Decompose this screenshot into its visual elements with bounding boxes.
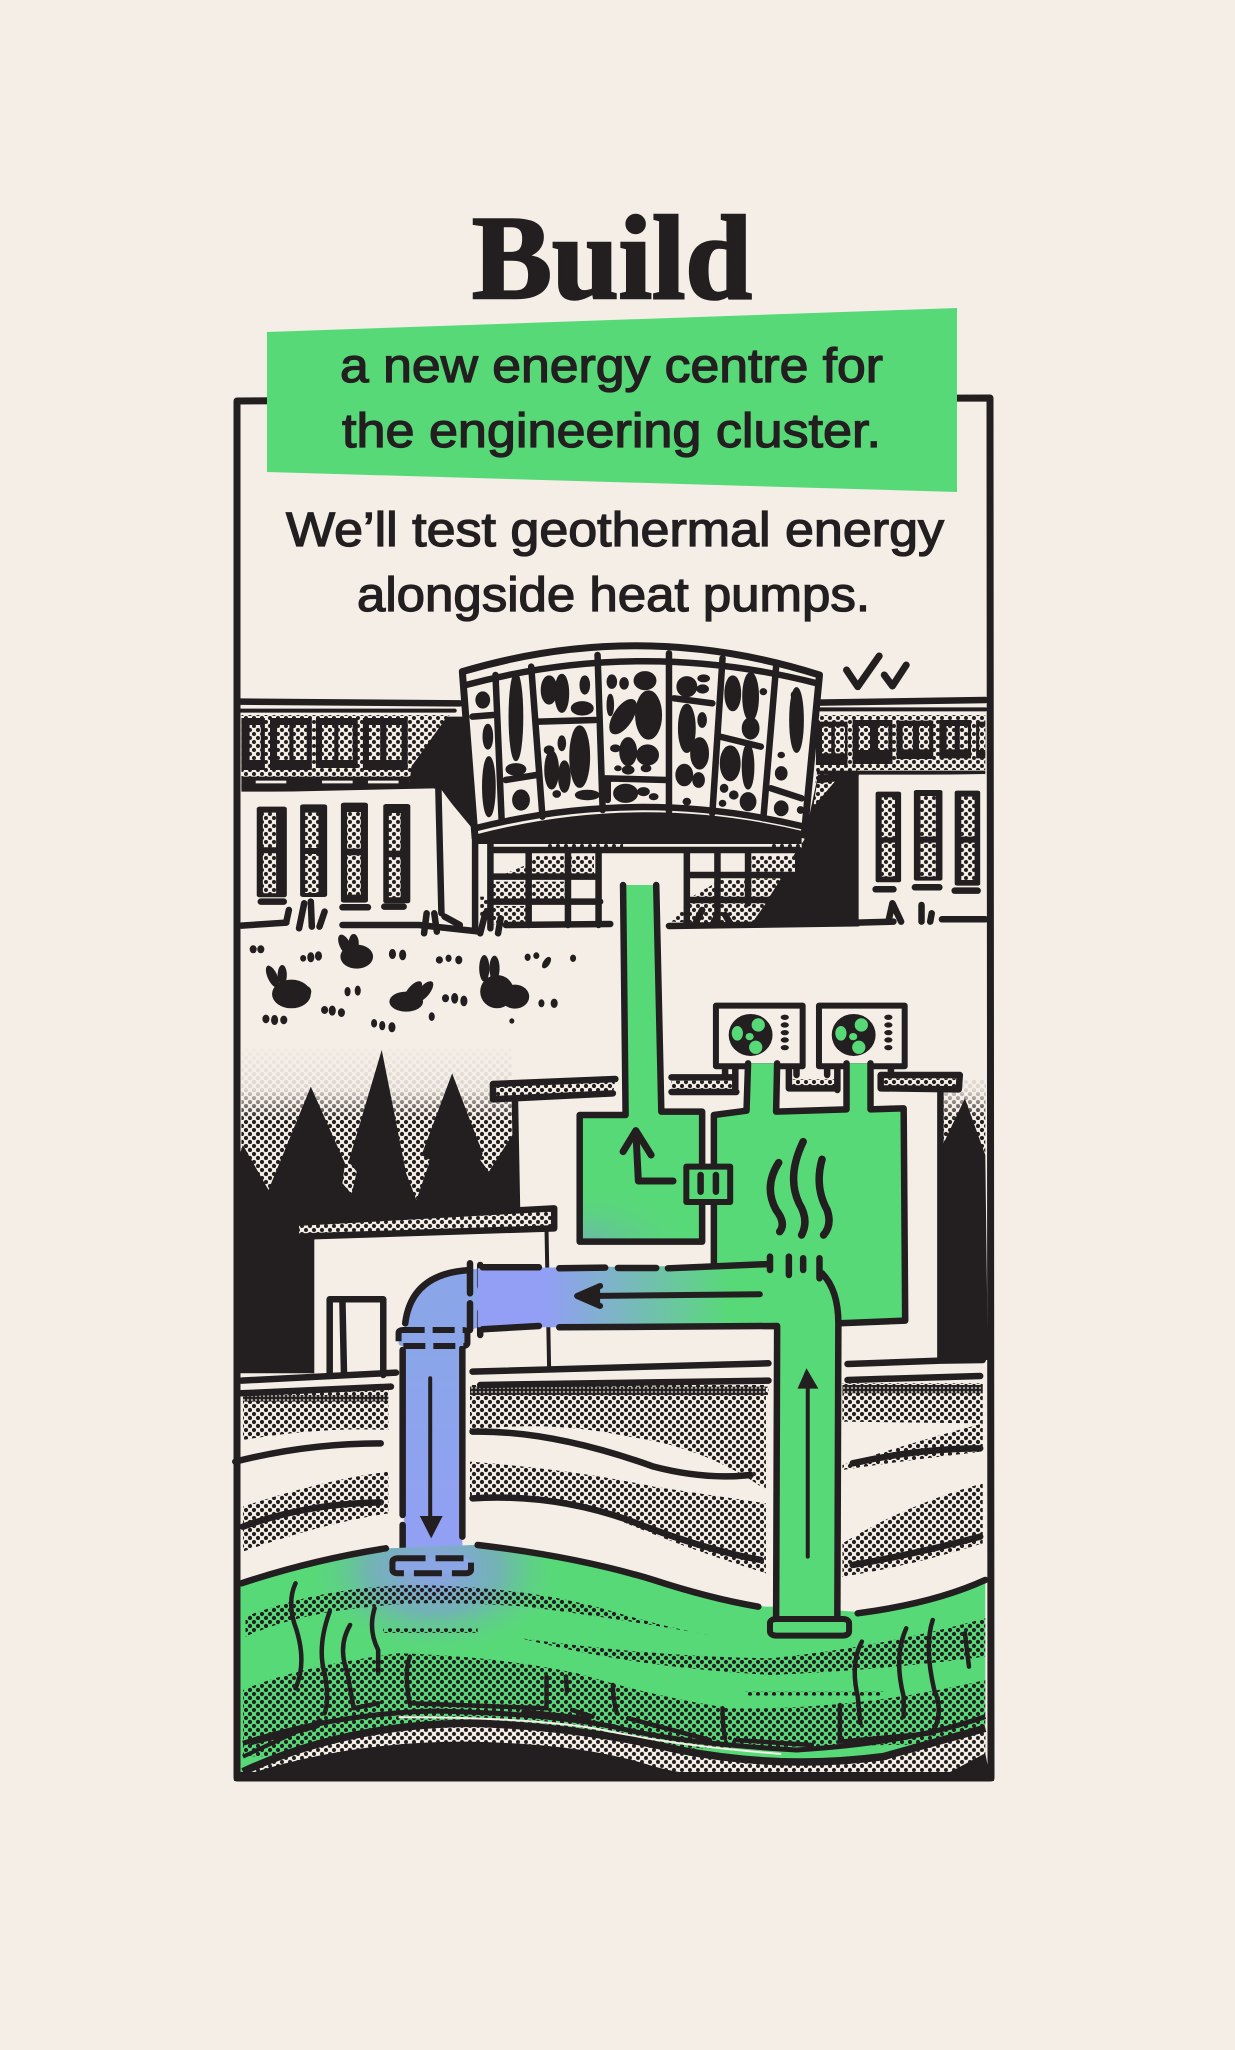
- valve between tanks: [686, 1167, 730, 1202]
- arrow: pipe flow left: [577, 1286, 760, 1306]
- subtitle text: [286, 504, 944, 622]
- buried reeds: [291, 1583, 969, 1745]
- left wing windows: [257, 788, 475, 930]
- outer frame: [234, 398, 994, 1781]
- ground line and grass tufts: [241, 902, 985, 933]
- ground floor glazing: [475, 840, 802, 930]
- arrow: pipe flow up: [801, 1373, 815, 1557]
- supply pipe and pipe arrows: [392, 1257, 849, 1636]
- pipe outlines: [483, 1257, 838, 1620]
- halftone rock layers: [243, 1385, 983, 1577]
- subtitle text: We’ll test geothermal energy: [286, 504, 944, 557]
- icon: rabbits: [263, 934, 529, 1012]
- illustration: energy centre: [235, 885, 988, 1560]
- illustration: campus building: [240, 646, 985, 1066]
- bedrock layers: [243, 1711, 990, 1780]
- banner text: [340, 340, 883, 458]
- icon: check marks: [847, 656, 906, 687]
- rock strata lines: [235, 1432, 980, 1565]
- banner text: the engineering cluster.: [342, 405, 881, 458]
- blue return pipe with elbow: [399, 1263, 480, 1560]
- subtitle text: alongside heat pumps.: [357, 569, 870, 622]
- ground halftone upper band: [243, 1383, 983, 1402]
- left green tank: [580, 885, 702, 1242]
- rabbit footprints: [251, 946, 575, 1031]
- bottom collar of return pipe: [392, 1558, 471, 1573]
- ground surface lines: [241, 1360, 983, 1393]
- low plant building: [299, 1208, 554, 1375]
- green supply pipe: [478, 1265, 838, 1620]
- green banner: [267, 308, 957, 492]
- title: Build: [472, 191, 752, 324]
- left wing upper storey: [240, 702, 474, 927]
- tree silhouettes: [235, 1050, 518, 1373]
- right tree silhouette: [942, 1098, 988, 1360]
- geothermal layer: [240, 1542, 988, 1772]
- right green tank: [714, 1063, 905, 1323]
- banner text: a new energy centre for: [340, 340, 883, 393]
- curved drum with patterned panels: [462, 646, 819, 844]
- halftone sky: [240, 1040, 985, 1200]
- upper building roof and walls: [493, 1068, 960, 1360]
- bottom collar of supply pipe: [770, 1619, 849, 1636]
- icon: steam: [770, 1142, 829, 1235]
- illustration: underground strata: [235, 1385, 990, 1780]
- geothermal halftone bands: [243, 1585, 985, 1757]
- heat pump units: [716, 1006, 905, 1066]
- right wing: [751, 700, 985, 925]
- arrow: up and left: [623, 1131, 673, 1181]
- arrow: pipe flow down: [423, 1378, 439, 1534]
